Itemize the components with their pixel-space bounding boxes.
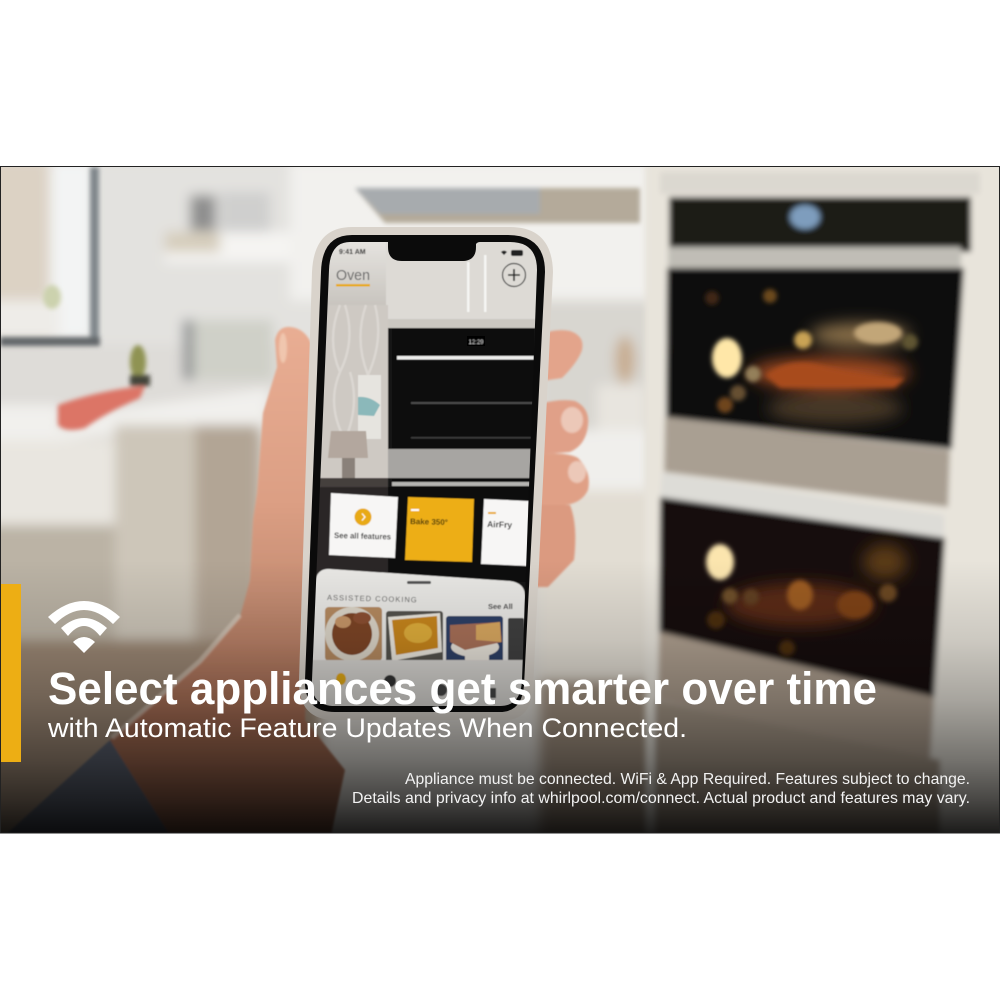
assisted cooking sheet [310,569,526,712]
dark gradient overlay [0,560,1000,833]
card: bake 350: Bake 350° [410,517,448,527]
photo: hand holding phone [0,327,589,840]
phone screen contents [305,240,540,715]
notch [388,241,476,261]
photo: double wall oven [645,160,1000,840]
food photo: roast [325,607,382,661]
food photo: partial [508,618,524,660]
kitchen wall and cabinets, blurred [0,160,670,840]
oven on screen [392,328,534,488]
disclaimer: Details and privacy info at whirlpool.com/connect. Actual product and features may vary. [352,790,970,807]
yellow accent bar [1,584,21,762]
assisted cooking sheet: See All [488,602,513,611]
bottom nav bar [312,659,523,706]
screen title: Oven: Oven [336,267,370,284]
card: bake 350 [405,497,474,562]
food photo: cake [445,615,504,660]
card: airfry: AirFry [487,519,513,530]
photo: glowing food and lights inside ovens [705,289,918,656]
phone bezel [305,235,545,712]
food photo: casserole [386,611,443,663]
status time: 9:41 AM [339,249,366,256]
heading: Select appliances get smarter over time [48,663,877,714]
image frame [0,166,1000,833]
subheading: with Automatic Feature Updates When Connected. [47,713,687,743]
artwork [358,375,381,439]
card: airfry [481,499,529,566]
disclaimer [352,771,970,807]
wallpaper wall [320,305,389,479]
icon: wifi [48,601,120,653]
photo: kitchen background scene [0,160,1000,840]
status icons [501,250,523,256]
photo: hood, window frame and towel details [0,167,640,430]
disclaimer: Appliance must be connected. WiFi & App Required. Features subject to change. [405,771,970,788]
add button [502,264,526,286]
cabinets [384,240,540,323]
phone [299,227,553,720]
card: see all features: See all features [334,531,392,542]
lamp [328,431,368,458]
phone screen contents: 12:29 [468,340,484,346]
phone case [299,227,553,720]
assisted cooking sheet: ASSISTED COOKING [327,593,418,604]
card: see all features [329,493,398,558]
